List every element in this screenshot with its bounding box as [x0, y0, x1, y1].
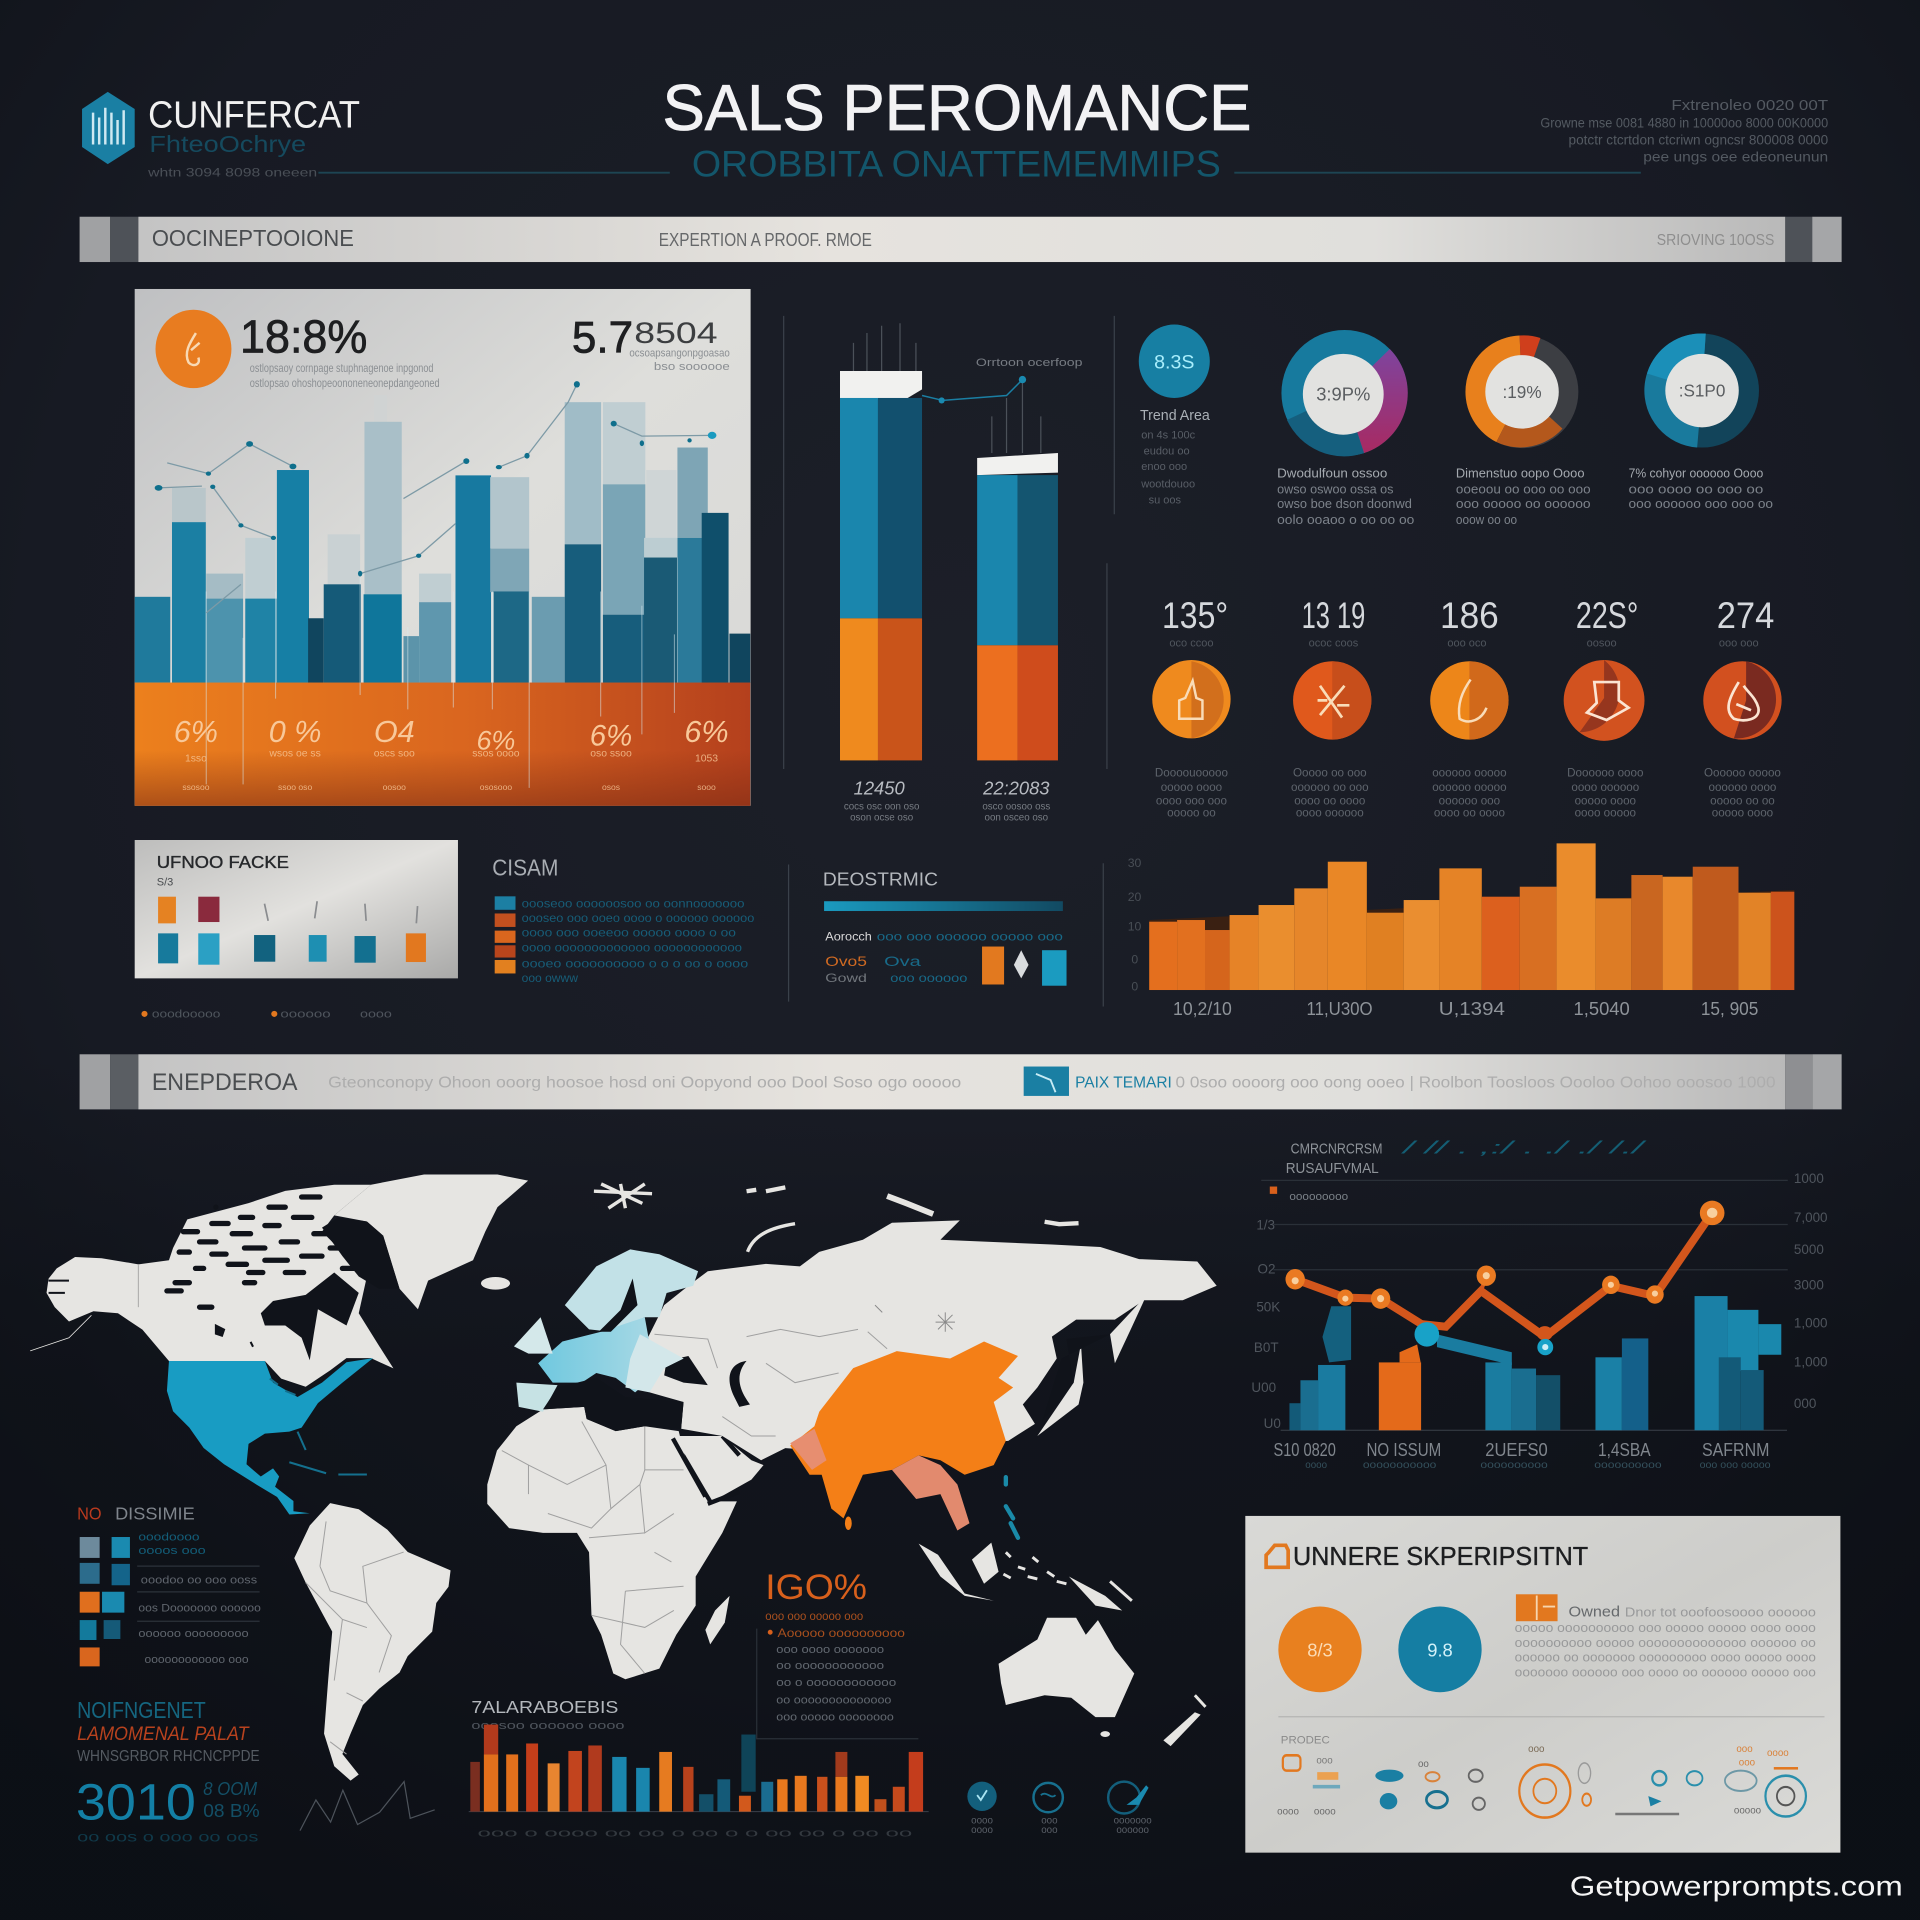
orange band percentages: wsos oe ss	[268, 749, 321, 760]
stat numbers: ooo oco	[1447, 638, 1487, 650]
text block with icon: Owned	[1569, 1604, 1620, 1620]
axis labels: 50K	[1256, 1299, 1280, 1314]
bar labels: oon osceo oso	[985, 812, 1049, 823]
text block with icon: ooooooo oooooo ooo oooo oo oooooo ooooo ooo	[1515, 1664, 1816, 1679]
trend area badge: su oos	[1149, 494, 1182, 506]
subtitle: OROBBITA ONATTEMEMMIPS	[692, 143, 1221, 184]
panel: orange bar chart: 10	[1128, 920, 1142, 934]
callout: 160%: oo oooooooooooo	[776, 1660, 884, 1672]
bar two	[977, 453, 1058, 760]
kpi circles: 8/3	[1307, 1640, 1333, 1661]
donut 1	[1281, 330, 1408, 456]
stat captions: oooo ooo ooo	[1156, 794, 1227, 807]
donut 1: 3:9P%	[1316, 383, 1370, 404]
panel: mini metric: Ovo5	[825, 954, 867, 969]
stat captions: oooooo oooo	[1709, 781, 1776, 794]
text block: notes and big number	[76, 1697, 260, 1845]
stat captions: oooooo ooooo	[1432, 766, 1507, 779]
stat numbers: 186	[1440, 595, 1499, 636]
axis labels: B0T	[1254, 1340, 1279, 1355]
category labels: oooooooooo	[1594, 1460, 1662, 1471]
skyline bars	[135, 381, 750, 806]
trend area badge: eudou oo	[1144, 445, 1190, 457]
bar labels: 12450	[854, 778, 905, 799]
panel: orange bar chart: U,1394	[1439, 998, 1505, 1019]
axis labels: 5000	[1794, 1242, 1824, 1257]
orange band percentages: ssoo oso	[278, 782, 312, 792]
orange band percentages	[174, 715, 729, 792]
text block: notes and big number: WHNSGRBOR RHCNCPPDE	[77, 1748, 260, 1765]
stat numbers: 22S°	[1576, 595, 1638, 636]
stat captions: ooooo oooo	[1161, 781, 1222, 794]
section band 1: OOCINEPTOOIONE	[152, 225, 354, 251]
baltic sea	[599, 1278, 638, 1332]
logo	[82, 92, 360, 179]
section band 1	[80, 217, 1842, 262]
panel: orange bar chart: 11,U30O	[1307, 998, 1373, 1019]
kpi circles: 9.8	[1427, 1640, 1453, 1661]
callout: 160%: oo o oooooooooooo	[776, 1677, 896, 1689]
category labels: 1,4SBA	[1598, 1439, 1651, 1460]
australia and new zealand	[999, 1618, 1134, 1717]
section band 1: SRIOVING 10OSS	[1657, 232, 1774, 249]
axis labels: U0	[1264, 1416, 1281, 1431]
vertical drop lines	[206, 577, 674, 788]
panel: orange bar chart: 0	[1131, 980, 1138, 994]
orange band percentages: 6%	[590, 720, 632, 753]
orange band percentages: osos	[602, 782, 620, 792]
panel: summary card: oo	[1418, 1759, 1429, 1770]
panel: orange bar chart: 30	[1128, 856, 1142, 870]
stat: 5.7	[572, 314, 730, 373]
panel: summary card: oooo	[1314, 1807, 1336, 1818]
orange band percentages: oosoo	[383, 782, 406, 792]
stat: 18.8%	[240, 311, 440, 390]
orange band percentages: sooo	[697, 782, 716, 792]
bar one	[840, 371, 922, 760]
europe	[514, 1249, 698, 1412]
category labels: oooo	[1305, 1460, 1328, 1471]
header note: Fxtrenoleo 0020 00T	[1671, 98, 1828, 114]
trend area badge: 8.3S	[1154, 352, 1194, 374]
icon: orange badge	[156, 310, 231, 388]
category labels: SAFRNM	[1702, 1439, 1769, 1460]
callout: 160%: Aooooo oooooooooo	[778, 1627, 905, 1640]
south america	[294, 1503, 451, 1781]
arabia	[674, 1436, 764, 1501]
text block with icon: Dnor tot ooofoosoooo oooooo	[1625, 1604, 1816, 1619]
legend: regions	[77, 1504, 261, 1666]
panel: summary card: ooo	[1736, 1744, 1753, 1755]
legend: regions: oos Dooooooo oooooo	[138, 1602, 261, 1614]
orange band percentages: 1sso	[185, 754, 207, 765]
panel: orange bar chart: 20	[1128, 890, 1142, 904]
panel: text list: oooseo ooo ooeo oooo o oooooo oooooo	[522, 912, 754, 925]
panel: text list: oooo ooooooooooooo oooooooooooo	[522, 941, 742, 954]
stat captions	[1155, 766, 1781, 820]
orange band percentages: 0 %	[269, 715, 321, 749]
stat: 18.8%: ostlopsaoy cornpage stuphnagenoe inpgonod	[250, 362, 433, 375]
donut captions: oolo ooaoo o oo oo oo	[1277, 512, 1414, 527]
header note: potctr ctcrtdon ctcriwn ogncsr 800008 0000	[1569, 132, 1828, 147]
panel: text list	[492, 855, 754, 985]
trend area badge: enoo ooo	[1141, 461, 1187, 473]
icon: flag	[1024, 1067, 1069, 1096]
greenland	[334, 1175, 528, 1309]
madagascar	[705, 1596, 730, 1644]
usa and mexico	[167, 1358, 373, 1514]
axis labels	[1251, 1171, 1828, 1431]
panel: orange bar chart: 10,2/10	[1173, 998, 1232, 1019]
orange band percentages: 6%	[174, 715, 218, 749]
donut 3: :S1P0	[1679, 381, 1725, 401]
decorative sketch chart	[300, 1782, 435, 1831]
orange band percentages: 6%	[684, 715, 729, 749]
category labels: S10 0820	[1273, 1439, 1336, 1460]
caspian and black sea	[730, 1361, 750, 1407]
bottom bar chart	[469, 1697, 929, 1840]
category labels	[1273, 1439, 1771, 1471]
hudson bay	[261, 1272, 359, 1360]
panel: mini metric: Aorocch	[825, 929, 872, 943]
panel: small legend card: UFNOO FACKE	[157, 852, 289, 872]
panel: orange bar chart: 15, 905	[1701, 998, 1758, 1019]
stat captions: oooo oo oooo	[1434, 807, 1505, 820]
panel: line and bar combo chart	[1251, 1137, 1828, 1471]
logo: CUNFERCAT	[148, 94, 360, 136]
trend area badge: Trend Area	[1140, 408, 1211, 424]
axis labels: U00	[1251, 1380, 1276, 1395]
donut captions: ooow oo oo	[1456, 512, 1517, 527]
text block: notes and big number: oo oos o ooo oo oos	[77, 1830, 259, 1845]
panel: mini metric: ooo ooo oooooo ooooo ooo	[877, 929, 1063, 943]
panel: mini metric	[789, 864, 1067, 1002]
stat: 18.8%: 18:8%	[240, 311, 367, 363]
orange base	[135, 683, 750, 806]
stat captions: oooooo ooooo	[1432, 781, 1507, 794]
trend area badge: wootdouoo	[1140, 478, 1195, 490]
alaska tail	[30, 1315, 91, 1351]
stat numbers: ooo ooo	[1719, 638, 1759, 650]
old world	[481, 1184, 1217, 1746]
callout: 160%: IGO%	[765, 1567, 867, 1607]
trend lines	[159, 384, 711, 613]
arctic channels	[167, 1197, 355, 1307]
category labels: NO ISSUM	[1367, 1439, 1441, 1460]
stat numbers: 13 19	[1302, 595, 1365, 636]
orange band percentages: 1053	[695, 754, 718, 765]
stat captions: ooooo oo oo	[1710, 794, 1775, 807]
panel: summary card: ooooo	[1734, 1805, 1762, 1816]
orange band percentages: ssosoo	[182, 782, 210, 792]
donut captions: Dwodulfoun ossoo	[1277, 466, 1387, 481]
stat numbers: 135°	[1162, 595, 1228, 636]
panel: text list: oooseoo oooooosoo oo oonnooooooo	[522, 897, 744, 910]
callout: 160%: oo oooooooooooooo	[776, 1694, 891, 1706]
stat: 5.7: ocsoapsangonpgoasao	[629, 347, 730, 359]
world map	[30, 1175, 1217, 1781]
section band 2: Gteonconopy Ohoon ooorg hoosoe hosd oni Oopyond ooo Dool Soso ogo ooooo	[328, 1074, 961, 1091]
legend: regions: ooodoo oo ooo ooss	[141, 1574, 258, 1586]
bottom icons: oooo	[971, 1815, 993, 1826]
panel: small legend card: S/3	[157, 876, 173, 888]
panel: two tall stacked bars	[784, 316, 1082, 823]
orange band percentages: ssos oooo	[472, 749, 520, 760]
stat captions: oooooo oo ooo	[1291, 781, 1369, 794]
header rules	[318, 172, 1641, 174]
panel: line and bar combo chart: ooooooooo	[1289, 1191, 1348, 1203]
logo: FhteoOchrye	[149, 131, 306, 157]
panel: text list: ooo owww	[522, 972, 579, 985]
legend row: oooo	[360, 1009, 392, 1021]
donut captions: owso boe dson doonwd	[1277, 496, 1412, 511]
stat captions: Doooooo oooo	[1567, 766, 1643, 779]
donut 3	[1644, 334, 1759, 448]
donut captions: ooo oooo oo ooo oo	[1629, 481, 1763, 496]
text block: notes and big number: 3010	[76, 1773, 196, 1831]
axis labels: 000	[1794, 1396, 1816, 1411]
stat numbers: oosoo	[1587, 638, 1617, 650]
icon: flame	[1430, 661, 1509, 740]
category labels: 2UEFS0	[1485, 1439, 1548, 1460]
panel: main bar chart	[135, 289, 751, 806]
stat captions: Ooooo oo ooo	[1293, 766, 1367, 779]
section band 1: EXPERTION A PROOF. RMOE	[659, 229, 872, 250]
trend area badge: on 4s 100c	[1141, 429, 1196, 441]
axis labels: 7,000	[1794, 1210, 1828, 1225]
kpi circles	[1278, 1607, 1482, 1692]
legend: regions: oooooo ooooooooo	[138, 1628, 249, 1640]
header note: Growne mse 0081 4880 in 10000oo 8000 00K0000	[1540, 115, 1828, 130]
panel: orange bar chart: 0	[1131, 953, 1138, 967]
connector	[922, 380, 1022, 400]
section band 2: PAIX TEMARI	[1075, 1074, 1172, 1091]
legend: regions: oooos ooo	[138, 1545, 206, 1557]
panel: mini metric: Ova	[884, 954, 922, 969]
section band 2	[80, 1054, 1842, 1109]
siberia marks	[875, 1305, 955, 1332]
bottom bar chart: ooo o oooo oo oo o oo o o oo oo o oo oo	[478, 1828, 912, 1840]
axis labels: O2	[1258, 1261, 1276, 1276]
stat: 5.7: bso soooooe	[654, 361, 730, 373]
category labels: oooooooooo	[1480, 1460, 1548, 1471]
legend row	[141, 1009, 392, 1021]
donut captions	[1277, 466, 1773, 527]
donut captions: ooo ooooo oo oooooo	[1456, 496, 1591, 511]
legend: regions: DISSIMIE	[115, 1504, 195, 1524]
axis labels: 1000	[1794, 1171, 1824, 1186]
bottom icons: oooo	[971, 1825, 993, 1836]
orange band percentages: O4	[374, 715, 415, 749]
header	[82, 71, 1828, 184]
stat numbers	[1162, 595, 1774, 650]
panel: mini metric: DEOSTRMIC	[823, 868, 938, 889]
orange trend line	[1295, 1213, 1712, 1337]
text block: notes and big number: NOIFNGENET	[77, 1697, 206, 1723]
trend area badge	[1139, 324, 1211, 506]
bar labels: 22:2083	[982, 778, 1050, 799]
panel: five stat icons	[1152, 595, 1782, 820]
southeast asia islands	[919, 1543, 1132, 1610]
legend swatches	[80, 1537, 130, 1666]
china and india	[790, 1341, 1018, 1518]
panel: small legend card	[135, 840, 458, 978]
axis labels: 1,000	[1794, 1355, 1828, 1370]
text block with icon	[1515, 1594, 1816, 1679]
legend row: oooooo	[280, 1009, 331, 1021]
stat numbers: oco ccoo	[1169, 638, 1213, 650]
category labels: ooooooooooo	[1363, 1460, 1437, 1471]
stat captions: ooooo oooo	[1575, 794, 1636, 807]
panel: text list: oooo ooo ooeeoo ooooo oooo o oo	[522, 927, 736, 940]
card bars	[158, 897, 426, 965]
stat: 18.8%: ostlopsao ohoshopeoononeneonepdangeoned	[250, 377, 440, 390]
stat numbers: ococ coos	[1309, 638, 1359, 650]
panel: mini metric: Gowd	[825, 971, 867, 985]
stat captions: oooo oooooo	[1296, 807, 1364, 820]
icon: hand	[1152, 660, 1231, 738]
text block with icon: oooooo oo ooooooo ooooooooo oooo ooooo oooo	[1515, 1650, 1816, 1665]
legend: regions: oooooooooooo ooo	[144, 1654, 249, 1666]
orange band percentages: 6%	[476, 725, 515, 755]
panel: line and bar combo chart: CMRCNRCRSM	[1291, 1141, 1382, 1157]
section band 2: 0 0soo oooorg ooo oong ooeo | Roolbon Toosloos Oooloo Oohoo ooosoo 1000	[1176, 1074, 1776, 1091]
text block with icon: ooooo oooooooooo ooo ooooo ooooo oooo oooo	[1515, 1620, 1816, 1635]
stat captions: ooooo oo	[1167, 807, 1216, 820]
stat numbers: 274	[1717, 595, 1774, 636]
panel: mini metric: ooo oooooo	[890, 971, 968, 985]
callout: 160%	[757, 1567, 918, 1739]
americas and greenland	[30, 1175, 528, 1781]
africa	[487, 1407, 737, 1679]
callout: 160%: ooo oooo ooooooo	[776, 1644, 884, 1656]
orange band percentages: ososooo	[480, 782, 512, 792]
legend row: ooodooooo	[152, 1009, 220, 1021]
icon: orange house	[1266, 1545, 1288, 1567]
icon: drop	[1014, 950, 1029, 978]
callout: 160%: ooo ooooo oooooooo	[776, 1711, 894, 1723]
donut 2	[1465, 335, 1578, 448]
stat captions: ooooo oooo	[1712, 807, 1773, 820]
callout: 160%: ooo ooo ooooo ooo	[765, 1610, 863, 1623]
panel: summary card: PRODEC	[1281, 1735, 1330, 1747]
bar labels	[844, 778, 1050, 823]
bottom bar chart: ooosoo oooooo oooo	[471, 1720, 624, 1732]
stat captions: oooooo ooo	[1439, 794, 1500, 807]
mediterranean	[543, 1378, 684, 1431]
donut captions: ooo oooooo ooo ooo oo	[1629, 496, 1773, 511]
trend markers	[1285, 1201, 1724, 1355]
panel: summary card: oooo	[1277, 1807, 1299, 1818]
watermark: Getpowerprompts.com	[1570, 1871, 1903, 1902]
text block with icon: oooooooooo ooooo oooooooooooooo oooooo oo	[1515, 1635, 1816, 1650]
stat captions: oooo oo oooo	[1294, 794, 1365, 807]
donut captions: ooeoou oo ooo oo ooo	[1456, 481, 1591, 496]
icon: sock	[1564, 660, 1644, 741]
axis labels: 1/3	[1256, 1217, 1275, 1232]
bottom icons: oooooo	[1116, 1825, 1150, 1836]
header note	[1540, 98, 1828, 165]
panel: summary card: oooo	[1767, 1748, 1789, 1759]
bar labels: osco oosoo oss	[982, 801, 1050, 812]
panel: summary card: ooo	[1739, 1758, 1756, 1769]
icon: drops	[1703, 661, 1782, 740]
legend: regions: ooodoooo	[138, 1531, 200, 1543]
panel: orange bar chart: 1,5040	[1573, 998, 1630, 1019]
arctic islands	[594, 1184, 1079, 1252]
stat captions: Oooooo ooooo	[1704, 766, 1781, 779]
text block: notes and big number: 08 B%	[203, 1800, 260, 1821]
panel: line and bar combo chart: / // . ,:/ . ./ ./ /./	[1401, 1137, 1648, 1157]
bottom icons	[967, 1782, 1152, 1836]
stat captions: oooo oooooo	[1571, 781, 1639, 794]
stat: 5.7: 5.7	[572, 314, 633, 363]
donut captions: 7% cohyor oooooo Oooo	[1629, 466, 1763, 481]
mini icons	[1283, 1755, 1806, 1818]
panel: text list: CISAM	[492, 855, 558, 881]
orange band percentages: oso ssoo	[590, 749, 632, 760]
eurasia	[645, 1220, 1217, 1460]
section band 2: ENEPDEROA	[152, 1069, 298, 1096]
panel: two tall stacked bars: Orrtoon ocerfoop	[976, 357, 1082, 369]
panel: donut charts	[1107, 316, 1773, 769]
bar labels: oson ocse oso	[850, 812, 914, 823]
bottom bar chart: 7ALARABOEBIS	[471, 1697, 618, 1717]
axis labels: 3000	[1794, 1277, 1824, 1292]
legend: regions: NO	[77, 1504, 102, 1524]
stat captions: Doooouooooo	[1155, 766, 1228, 779]
axis labels: 1,000	[1794, 1315, 1828, 1330]
card heading: UNNERE SKPERIPSITNT	[1293, 1543, 1588, 1571]
donut captions: Dimenstuo oopo Oooo	[1456, 466, 1584, 481]
panel: summary card: ooo	[1316, 1755, 1333, 1766]
stat: 5.7: 8504	[634, 317, 718, 350]
text block: notes and big number: 8 OOM	[203, 1778, 258, 1799]
bottom icons: ooo	[1041, 1825, 1058, 1836]
bar labels: cocs osc oon oso	[844, 801, 920, 812]
panel: summary card: ooo	[1528, 1744, 1545, 1755]
iceland	[481, 1277, 510, 1290]
panel: orange bar chart	[1103, 843, 1794, 1019]
logo: whtn 3094 8098 oneeen	[147, 165, 317, 179]
icon: tools	[1293, 661, 1371, 740]
category labels: ooo ooo ooooo	[1700, 1460, 1771, 1471]
north america	[47, 1185, 393, 1387]
panel: line and bar combo chart: RUSAUFVMAL	[1286, 1161, 1379, 1177]
header note: pee ungs oee edeoneunun	[1643, 150, 1828, 165]
donut captions: owso oswoo ossa os	[1277, 481, 1393, 496]
bottom icons: ooo	[1041, 1815, 1058, 1826]
donut 2: :19%	[1503, 382, 1542, 402]
bottom icons: ooooooo	[1114, 1815, 1152, 1826]
panel: text list: oooeo oooooooooo o o o oo o oooo	[522, 957, 748, 970]
title: SALS PEROMANCE	[662, 71, 1251, 144]
orange band percentages: oscs soo	[374, 749, 415, 760]
panel: summary card	[1245, 1516, 1840, 1853]
stat captions: oooo ooooo	[1575, 807, 1636, 820]
text block: notes and big number: LAMOMENAL PALAT	[77, 1723, 250, 1745]
